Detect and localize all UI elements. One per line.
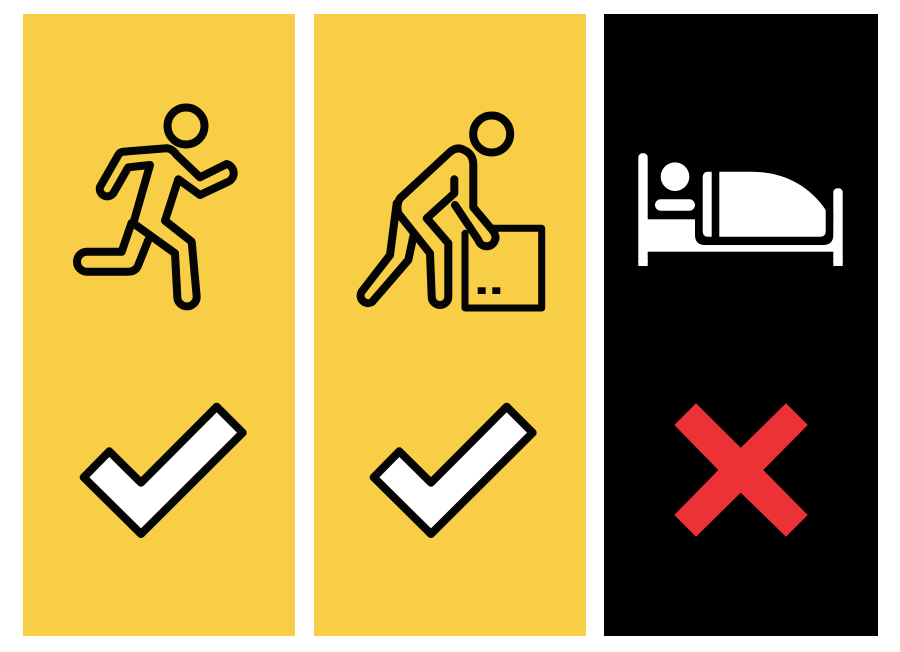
icon: person in bed [638, 153, 843, 266]
icon: check mark [84, 407, 243, 534]
panel: resting in bed [604, 14, 878, 636]
icon: person lifting box [361, 116, 542, 308]
panel: running [23, 14, 295, 636]
panel: lifting [314, 14, 586, 636]
icon: running person [77, 108, 234, 306]
icon: check mark [374, 407, 533, 534]
icon: red cross [674, 403, 808, 537]
icon: box label marks [478, 287, 500, 294]
